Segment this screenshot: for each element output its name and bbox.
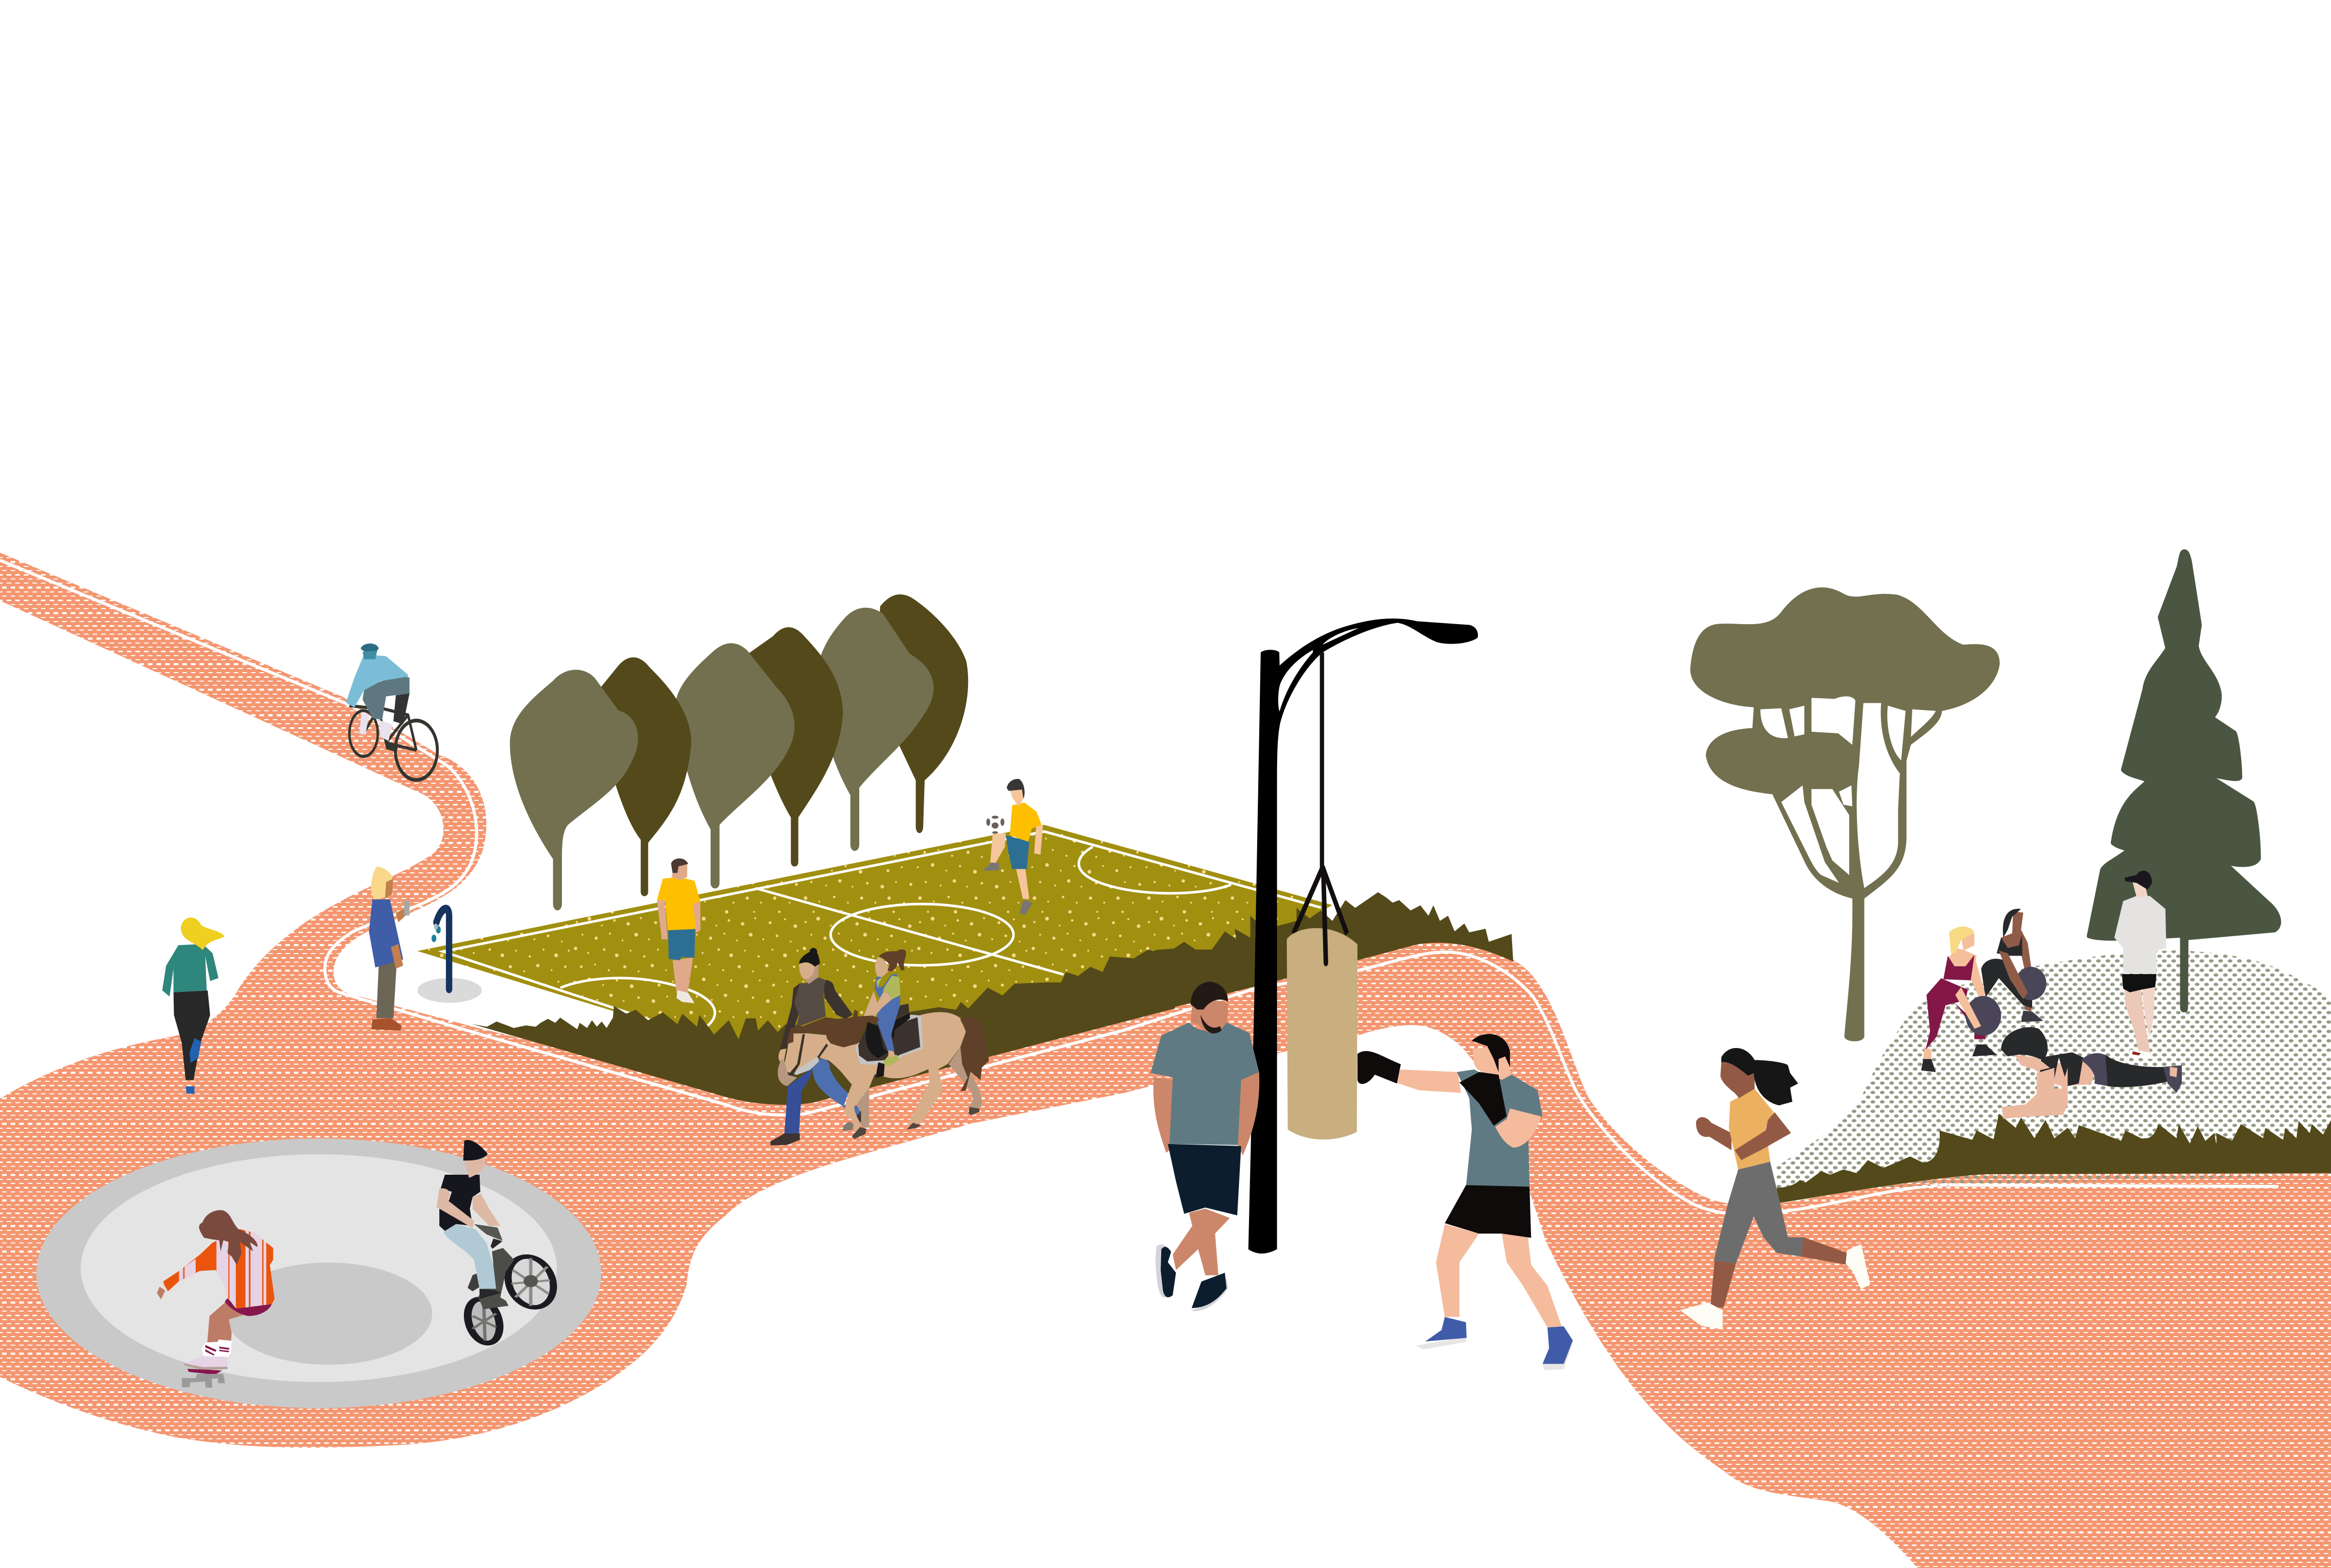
boy juggling football: [983, 779, 1043, 915]
BMX rider: [437, 1140, 558, 1344]
running track path: [0, 553, 2331, 1568]
handler: [770, 948, 860, 1146]
football pitch: [417, 825, 1332, 1073]
grass bank below pitch: [472, 892, 1513, 1105]
man leaning on lamp post: [1150, 982, 1259, 1311]
woman running: [1680, 1048, 1870, 1329]
illustration: active park scene: [0, 550, 2331, 1568]
player in yellow shirt: [657, 859, 700, 1003]
rider: [863, 949, 906, 1066]
woman drinking at fountain: [369, 867, 410, 1031]
drinking fountain: [417, 909, 482, 1003]
skater girl: [157, 1210, 276, 1388]
horse body: [784, 1012, 966, 1132]
woman with medicine ball, dark top: [1981, 909, 2046, 1022]
runner with yellow hair: [162, 917, 225, 1094]
grass bank below hill: [1777, 1114, 2331, 1203]
cyclist: [346, 644, 437, 780]
umbrella pine tree: [1690, 587, 2000, 1041]
tack: [856, 1015, 923, 1065]
blonde woman with medicine ball: [1921, 926, 2001, 1072]
woman doing plank: [2001, 1027, 2182, 1119]
street lamp: [1249, 619, 1478, 1253]
tree row: [510, 595, 968, 910]
skate bowl: [36, 1138, 601, 1408]
fitness hill with dotted texture: [1777, 951, 2331, 1190]
man in white t-shirt with cap: [2114, 871, 2167, 1059]
horse with rider and handler: [770, 948, 989, 1146]
fir tree: [2088, 552, 2279, 1010]
boxer: [1357, 1034, 1573, 1370]
heavy punching bag: [1287, 653, 1357, 1139]
mane and tail: [786, 1010, 879, 1048]
